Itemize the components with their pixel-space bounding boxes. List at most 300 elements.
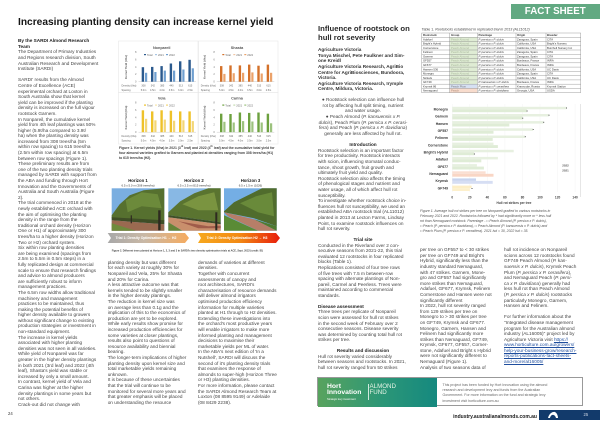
results and discussion — [318, 348, 406, 370]
article column 2: kernels tended to be slightly smaller — [108, 288, 182, 293]
chart: Nonpareil: 4.0m — [159, 89, 165, 92]
introduction: tance, shoot growth, fruit growth and — [318, 165, 394, 170]
table 1: rootstocks: Monegro — [423, 72, 434, 76]
chart: Vela: 513 — [179, 135, 183, 138]
rootstock labels: Garnem — [435, 115, 448, 119]
article column 3: Nutshell', SARDI will discuss the — [198, 355, 265, 360]
article column 1: are being examined (spacings from — [18, 251, 91, 256]
article column 2: The longer-term implications of higher — [108, 355, 186, 360]
chart: Carina: Carina — [231, 96, 244, 100]
chart: Shasta: 3.0m — [256, 89, 262, 92]
2022 bars — [452, 107, 566, 188]
article column 3: that examines the response of — [198, 366, 261, 371]
article column 1: not others. — [18, 396, 40, 401]
authors and affiliations — [318, 47, 404, 91]
results column 3: hull rot incidence on Nonpareil — [504, 247, 567, 252]
results column 2: Analysis of two seasons data of — [420, 365, 486, 370]
results column 2: from 129 strikes per tree on — [420, 309, 477, 314]
chart: Shasta: 2021 — [236, 53, 243, 57]
chart: Shasta: 4.5m — [228, 89, 234, 92]
article column 2: A less attractive outcome was that — [108, 282, 179, 287]
article column 2: for each variety at roughly 30% for — [108, 265, 179, 270]
article column 3: the SARDI Almond Research Team at — [198, 389, 276, 394]
table 1: rootstocks: Peach Almond — [451, 76, 469, 80]
authors and affiliations: Agriculture Victoria Research, AgriBio — [318, 64, 403, 69]
table 1: rootstocks: Georgia, USA — [517, 89, 534, 93]
figure 2 caption: Figure 2. Different trees planted at Horizon 1, 2, 3 and 3 in SARDI's two density optimisation trials at ACE, Sept. 2022 (credit: ID) — [112, 250, 263, 252]
table 1: rootstocks: Zaragoza, Spain — [517, 50, 538, 54]
article column 3: (08 8429 2238). — [198, 400, 231, 405]
heading: hull rot article — [318, 24, 410, 42]
table 1: rootstocks: Peach Almond — [451, 50, 469, 54]
figure 1 hull rot caption: Figure 1. Average hull rot strikes per tree on Nonpareil grafted to various rootstocks in — [420, 209, 550, 213]
significance markers — [472, 108, 567, 189]
article column 1: yield can be improved if the planting — [18, 100, 93, 105]
chart: Nonpareil: Kernel Yield (t/ha) — [124, 55, 128, 79]
x axis: 40 — [486, 195, 489, 199]
chart: Shasta: 2 — [213, 72, 215, 76]
table 1: rootstocks: Bright's Hybrid — [423, 42, 442, 46]
chart: Carina: 440 — [248, 135, 252, 138]
article column 1: the aim of optimising the planting — [18, 212, 87, 217]
rootstock labels: GF677 — [438, 165, 448, 169]
article column 1: The trial commenced in 2018 at the — [18, 200, 91, 205]
article column 2: increased production efficiencies for — [108, 327, 182, 332]
introduction: water usage, all of which affect hull rot — [318, 187, 397, 192]
article column 1: non-standard equipment. — [18, 329, 70, 334]
table 1: rootstocks: Zaragoza, Spain — [517, 72, 538, 76]
legend: 2022 — [562, 164, 569, 168]
article column 1: ha) when the planting density was — [18, 133, 89, 138]
article column 3: characterisation of resource demands — [198, 288, 276, 293]
results column 2: Krymsk, GF677, GF557, Corner- — [420, 342, 488, 347]
x axis: 120 — [555, 195, 560, 199]
table 1: rootstocks: Bordeaux, France — [517, 59, 540, 63]
introduction: susceptibility. — [318, 193, 346, 198]
chart: Nonpareil: 2022 — [169, 53, 175, 57]
table 1: rootstocks: Krymsk 86 — [423, 84, 437, 88]
article column 1: trees/ha to a higher density (Horizon — [18, 234, 94, 239]
results column 3: help-your-business-grow/research- — [504, 348, 576, 353]
article column 2 — [108, 260, 186, 405]
article column 1: and advice to almond producers — [18, 273, 85, 278]
article column 1: The 6.5m row widths allow traditional — [18, 290, 95, 295]
article column 2: Nonpareil and Vela, 25% for Shasta — [108, 271, 182, 276]
key points bullets: rot by affecting hull split timing, nutrient — [323, 103, 403, 108]
article column 2: results also point to questions of — [108, 338, 175, 343]
figure 1 hull rot caption: □ Peach (P. persica x P. davidiana), □ Peach Almond (P. kansuensis x P. dulcis) and — [420, 224, 547, 228]
results column 2: Monegro, Garnem, Hansen and — [420, 326, 486, 330]
table 1: rootstocks: Group — [451, 33, 460, 37]
table 1: rootstocks: California, USA — [517, 67, 536, 71]
chart: Carina: Spacing — [201, 140, 210, 142]
article column 1: These preliminary results are from — [18, 161, 89, 166]
chart: Vela: 2022 — [169, 104, 175, 108]
disease assessment: in the second week of February over 2 — [318, 321, 398, 326]
chart: Vela: 308 — [141, 135, 146, 138]
figure 1 hull rot caption: rot than Nemaguard rootstock. Parentage - □ Peach Almond (P. persica x P. dulcis), — [420, 219, 547, 223]
chart: Shasta: 6 — [213, 57, 215, 61]
results column 3: program for the Australian almond — [504, 326, 575, 330]
chart: Carina: 2022 — [247, 104, 254, 108]
page number right: 25 — [584, 412, 588, 417]
article column 2: production are yet to be explored. — [108, 316, 178, 321]
heading: horizon 1: 6.5 x 5.0 m (308 trees/ha) — [121, 184, 155, 188]
article column 3: In the ABA's next edition of 'In a — [198, 349, 264, 354]
introduction: fluences hull rot susceptibility, we used an — [318, 204, 405, 209]
table 1: rootstocks: INRA — [547, 59, 554, 63]
table 1: rootstocks: P. persica x P. dulcis — [478, 76, 504, 80]
chart: Vela: 342 — [151, 135, 155, 138]
table 1: rootstocks: Peach Almond — [451, 59, 469, 63]
results column 3: For further information about the — [504, 314, 571, 319]
chart: Nonpareil: Total — [147, 53, 153, 57]
results and discussion: Results and discussion — [337, 348, 389, 353]
article column 2: implication of this to the economics of — [108, 310, 186, 315]
photo: horizon 3 orchard — [224, 188, 277, 231]
article column 3: Together with concurrent — [198, 271, 249, 276]
chart: Vela: 615 — [188, 135, 193, 138]
article column 2: While early results show promise for — [108, 321, 183, 326]
chart: Shasta: 2022 — [247, 53, 254, 57]
article column 1: In contrast, kernel yield of Vela and — [18, 379, 91, 384]
table 1: rootstocks: Zaragoza, Spain — [517, 37, 538, 41]
results column 3: Plum (P. persica x P. cerasifera), — [504, 270, 571, 275]
table 1: rootstocks: Peach Almond — [451, 37, 469, 41]
results column 3: and Nemaguard Peach (P. persi- — [504, 275, 572, 280]
table 1: rootstocks: CITA — [547, 37, 553, 41]
legend: 2021 — [562, 169, 569, 173]
results column 2: industry standard Nemaguard, — [420, 264, 483, 269]
2021 bars — [452, 109, 527, 191]
photo: horizon 2 orchard — [168, 188, 221, 231]
chart: Carina: 4.5m — [228, 140, 234, 142]
footer navy tab with logo and page number — [539, 410, 600, 420]
table 1: rootstocks: GF749 — [423, 80, 432, 84]
results column 3: www.horticulture.com.au/growers/ — [504, 342, 574, 347]
chart: Vela: 4.0m — [159, 140, 165, 142]
key points bullets: ● Rootstock selection can influence hull — [322, 97, 404, 102]
results column 2: more strikes than Nemaguard, — [420, 281, 483, 286]
figure 1 hull rot caption: February 2021 and 2022. Rootstocks followed by * had significantly more or ^ less hull — [420, 214, 551, 218]
x axis: 80 — [521, 195, 524, 199]
title: Increasing planting density can increase kernel yield — [18, 17, 273, 28]
icon: almond mark — [548, 412, 558, 418]
article column 1: rootstock Garnem. — [18, 111, 57, 116]
results column 3: particularly Monegro, Garnem, — [504, 298, 567, 303]
chart: Shasta: 0 — [213, 80, 215, 84]
results column 2: Cornerstone and Hansen were not — [420, 292, 492, 297]
article column 1: the ABA and funding through Hort — [18, 178, 88, 183]
chart: Carina: 4.0m — [238, 140, 243, 142]
table 1: rootstocks: Nickels — [423, 76, 433, 80]
trial site: pareil, Carmel and Peerless. Trees were — [318, 282, 402, 287]
key points bullets: dulcis), Peach Plum (P. persica x P. cerasi- — [319, 120, 407, 125]
chart: Vela: Vela — [158, 96, 166, 100]
chart: Shasta: 2.5m — [266, 89, 271, 92]
table 1: rootstocks: P. kansuensis x P. dulcis — [478, 80, 509, 84]
chart: Nonpareil: 4.5m — [150, 89, 156, 92]
chart: Carina: 615 — [266, 135, 271, 138]
chart: Nonpareil — [122, 46, 196, 92]
article column 1: greater in the higher density plantings — [18, 357, 96, 362]
figure 1 hull rot caption: □ Peach Plum (P. persica x P. cerasifera). 2021 lsd = 30, 2022 lsd = 35. — [420, 229, 528, 233]
article column 1: Innovation and the Governments of — [18, 184, 91, 189]
chart: Carina: 0 — [213, 130, 215, 134]
key points bullets: ● Peach Almond (P. kansuensis x P. — [326, 114, 400, 119]
article column 3: will enable irrigators to make more — [198, 327, 269, 332]
table 1: rootstocks: P. persica x P. dulcis — [478, 37, 504, 41]
table 1: rootstocks: Peach Almond — [451, 42, 469, 46]
chart: Nonpareil: 513 — [179, 85, 183, 88]
article column 1: The increase in kernel yields — [18, 335, 77, 340]
article column 1: within row spacing) to 615 trees/ha — [18, 144, 90, 149]
article column 1: experimental orchard at Loxton in — [18, 89, 88, 94]
table 1: rootstocks: California, USA — [517, 46, 536, 50]
article column 1: Carina was higher at the higher — [18, 385, 83, 390]
heading: horizon 2: Horizon 2 — [184, 178, 204, 183]
table 1: rootstocks: P. persica x P. dulcis — [478, 54, 504, 58]
table 1: rootstocks: P. persica x P. dulcis — [478, 72, 504, 76]
results column 2: Nemaguard (Figure 1). — [420, 359, 467, 364]
funding statement — [442, 382, 548, 403]
rootstock labels: GF749 — [438, 186, 448, 190]
results column 2: In 2022, hull rot severity ranged — [420, 303, 486, 308]
introduction: Introduction — [349, 142, 377, 147]
table 1: rootstocks: Nemaguard — [423, 89, 438, 93]
introduction: with scion, influencing stomatal conduc- — [318, 159, 401, 164]
figure 1 caption: to 615 trees/ha (H2). — [119, 156, 151, 160]
article column 2: on average less than 0.1g and the — [108, 305, 179, 310]
disease assessment — [318, 304, 402, 342]
results column 3: suensis x P. dulcis), Krymsk Peach — [504, 264, 576, 269]
disease assessment: was determined by counting total hull rot — [318, 332, 402, 337]
trial site: Replications consisted of four tree rows — [318, 265, 400, 270]
table 1: rootstocks: Bordeaux, France — [517, 80, 540, 84]
article column 1: Institute (SARDI) — [18, 66, 53, 71]
funding banner — [317, 377, 583, 406]
table 1: rootstocks: P. persica x P. dulcis — [478, 59, 504, 63]
article column 2: that greater emphasis will be placed — [108, 394, 182, 399]
authors and affiliations: Agriculture Victoria — [318, 47, 361, 52]
introduction: Rootstock selection also affects the timing — [318, 176, 405, 181]
rootstock labels: Monegro — [434, 108, 448, 112]
article column 1: increased from 308 trees/ha (5m — [18, 139, 86, 144]
chart: Carina: 2021 — [236, 104, 243, 108]
article column 3: optimised production efficiency — [198, 299, 262, 304]
chart: Nonpareil: Spacing — [122, 89, 131, 92]
article column 1: higher density available to growers — [18, 312, 90, 317]
table 1: rootstocks: UC Davis — [547, 67, 559, 71]
chart: Vela: 2.5m — [187, 140, 193, 142]
rootstock labels: GF557 — [438, 129, 448, 133]
heading: horizon 1: Horizon 1 — [128, 178, 148, 183]
table 1: rootstocks: P. persica x P. dulcis — [478, 50, 504, 54]
heading: horizon 2: 6.5 x 2.5 m (615 trees/ha) — [177, 184, 211, 188]
article column 1: SARDI' results from the Almond — [18, 77, 84, 82]
article column 1: in both 2021 (3rd leaf) and 2022 (4th — [18, 363, 94, 368]
introduction — [318, 142, 406, 231]
table 1: rootstocks: CITA — [547, 54, 553, 58]
chart frame — [118, 41, 278, 144]
chart: Carina: 342 — [229, 135, 234, 138]
article column 3 — [198, 260, 277, 405]
article column 1: Team — [18, 44, 30, 49]
chart: Nonpareil: 308 — [141, 85, 146, 88]
key points bullets: and water usage. — [345, 108, 381, 113]
chart: Carina: Total — [225, 104, 231, 108]
page number left: 24 — [8, 410, 13, 416]
article column 3: densities. — [198, 265, 218, 270]
logo panel: Hort Innovation Almond Fund: Hort — [327, 383, 341, 390]
article column 1: leaf), Shasta's yield was stable or — [18, 368, 87, 373]
article column 1: South Australia show that kernel — [18, 94, 85, 99]
results column 2: stone, Adafuel and Bright s Hybrid — [420, 348, 491, 353]
table 1: rootstocks: Cornerstone — [423, 46, 439, 50]
introduction: of phenological stages and nutrient and — [318, 181, 400, 186]
chart: Carina: 2 — [213, 123, 215, 127]
chart: Shasta: 4.0m — [238, 89, 243, 92]
article column 1: fully replicated design at commercial — [18, 262, 94, 267]
article column 1: yield from 4th leaf plantings was 50% — [18, 122, 95, 127]
introduction: ultimately fruit yield and quality. — [318, 170, 383, 175]
results column 2: Felinem had significantly more — [420, 331, 483, 336]
article column 2: total marketable yields remaining — [108, 366, 176, 371]
table 1: rootstocks: Rootstock — [423, 33, 437, 37]
article column 1: managed by SARDI with support from — [18, 172, 97, 177]
article column 1: By the SARDI Almond Research — [18, 38, 89, 43]
chart: Vela: 3.0m — [178, 140, 184, 142]
arrow: trial 1 — [108, 233, 189, 243]
chart: Carina: Kernel Yield (t/ha) — [202, 106, 206, 129]
article column 2: resource availability and biennial — [108, 344, 175, 349]
rootstock labels — [424, 108, 448, 190]
trial site: standards. — [318, 293, 340, 298]
table 1: rootstocks: P. persica x P. dulcis — [478, 42, 504, 46]
article column 1: traditional orchard density (Horizon — [18, 223, 91, 228]
trial site: evaluated 12 rootstocks in four replicated — [318, 254, 403, 259]
results column 3: "Integrated disease management — [504, 320, 573, 325]
x axis: 0 — [451, 195, 453, 199]
table 1: rootstocks: Zaragoza, Spain — [517, 54, 538, 58]
results column 2: on GF749, Krymsk and GF677. — [420, 320, 485, 325]
chart: Carina: 3.5m — [247, 140, 253, 142]
table 1: rootstocks: Peach Almond — [451, 72, 469, 76]
article column 1: 2.5m to 5.5m in 0.5m steps) in a — [18, 256, 85, 261]
heading: horizon 3 — [239, 178, 262, 188]
article column 1: one of the two planting density trials — [18, 167, 93, 172]
table 1: rootstocks: P. persica x P. dulcis — [478, 46, 504, 50]
chart: Carina: 6 — [213, 108, 215, 112]
article column 2: bearing. — [108, 349, 125, 354]
chart: Shasta: 5.0m — [219, 89, 225, 92]
rootstock labels: Bright's Hybrid — [424, 150, 448, 154]
key points bullets — [318, 97, 408, 136]
table 1: rootstocks: Peach Almond — [451, 46, 469, 50]
fact sheet badge — [511, 4, 600, 19]
table 1: rootstocks: P. persica x P. dulcis — [478, 67, 504, 71]
table 1: rootstocks: Peach Almond — [451, 54, 469, 58]
introduction: Point, to examine rootstock influences on — [318, 220, 403, 226]
article column 1: Centre of Excellence (ACE) — [18, 83, 75, 88]
article column 1: making the potential benefits of — [18, 307, 83, 312]
trial site — [318, 237, 404, 298]
article column 3: decisions to maximise their — [198, 338, 254, 343]
rootstock labels: Cornerstone — [428, 143, 448, 147]
chart: Nonpareil: 385 — [160, 85, 165, 88]
x axis: 20 — [468, 195, 472, 199]
table 1: rootstocks: Garnem — [423, 54, 434, 58]
article column 3: the orchard's most productive years — [198, 321, 272, 326]
article column 3: will deliver almond irrigators — [198, 293, 256, 298]
article column 1: production strategies or investment in — [18, 323, 96, 328]
results column 3: Hansen and Felinem. — [504, 303, 549, 308]
article column 1: While yield of Nonpareil was far — [18, 351, 84, 356]
funding statement: research and development levy and funds from the Australian — [442, 388, 540, 392]
results column 3: less hull rot than Peach Almond — [504, 286, 570, 291]
heading: hull rot article: Influence of rootstock on — [318, 24, 410, 33]
article column 1: One or H1) of approximately 300 — [18, 228, 86, 233]
table 1: rootstocks: Breeder — [547, 33, 558, 37]
chart: Vela: 5.0m — [141, 140, 146, 142]
article column 3: Extending these investigations into — [198, 316, 270, 321]
table 1: rootstocks: GF677 — [423, 63, 432, 67]
x axis: Hull rot strikes per tree — [497, 201, 532, 205]
chart: Vela: Kernel Yield (t/ha) — [124, 106, 128, 129]
results column 2: were not significantly different to — [420, 353, 487, 358]
authors and affiliations: Centre for AgriBiosciences, Bundoora, — [318, 70, 404, 75]
table 1: rootstocks: California, USA — [517, 42, 536, 46]
rootstock labels: Nemaguard — [429, 172, 448, 176]
chart: Vela: 4.5m — [150, 140, 156, 142]
rootstock labels: Adafuel — [436, 158, 448, 162]
chart: Vela: Density (t/ha) — [122, 135, 137, 138]
trial site: Conducted in the Riverland over 2 con- — [318, 243, 399, 248]
chart: Carina — [201, 96, 274, 142]
article column 1: management practices. — [18, 284, 67, 289]
article column 1: Australian Research and Development — [18, 61, 98, 66]
results column 2: Adafuel, GF677, Krymsk, Felinem — [420, 286, 490, 291]
article column 3: or H3) planting densities. — [198, 377, 250, 382]
article column 2: and 20% for Carina. — [108, 277, 149, 282]
article column 1: density plantings in some years but — [18, 391, 91, 396]
article column 1: The Department of Primary Industries — [18, 49, 96, 54]
results column 2: with 47 strikes. Garnem, Mone- — [420, 270, 485, 275]
article column 1: densities was not seen in all varieties. — [18, 346, 96, 351]
logo panel: Hort Innovation Almond Fund: Innovation — [327, 389, 361, 396]
rootstock labels: Hansen — [436, 122, 448, 126]
logo panel: Hort Innovation Almond Fund: ALMOND — [370, 383, 396, 390]
results column 3: Agriculture Victoria visit https:// — [504, 337, 568, 342]
introduction: Rootstock selection is an important factor — [318, 148, 404, 153]
chart: Nonpareil: 0 — [135, 80, 137, 84]
article column 2: It is because of these uncertainties — [108, 377, 180, 382]
heading: hull rot article: hull rot severity — [318, 33, 375, 42]
article column 1: scale to ensure that research findings — [18, 268, 96, 273]
chart: Carina: 513 — [257, 135, 262, 138]
article column 3: demands of varieties at different — [198, 260, 265, 265]
chart: Carina: 2.5m — [266, 140, 271, 142]
article column 2: monitored for several more years and — [108, 389, 186, 394]
table 1: rootstocks: Peach — [451, 89, 459, 93]
x axis — [451, 195, 578, 205]
table 1: rootstocks: P. persica x P. cerasifera — [478, 84, 509, 88]
article column 1: In Nonpareil, the cumulative kernel — [18, 116, 90, 122]
authors and affiliations: Victoria. — [318, 75, 336, 80]
results column 2: per tree on GF557 to < 30 strikes — [420, 247, 489, 252]
chart: Vela: 385 — [160, 135, 165, 138]
chart: Shasta: 513 — [257, 85, 262, 88]
